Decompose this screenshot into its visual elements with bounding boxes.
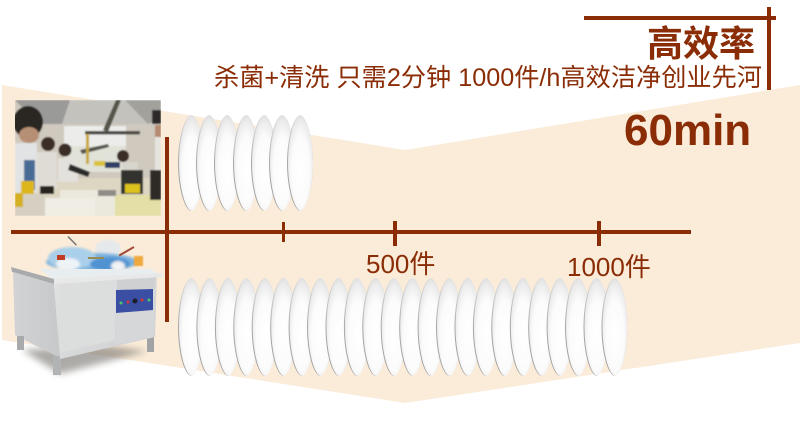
label: 500 pieces: 500件 bbox=[366, 249, 435, 279]
heading: 高效率 bbox=[647, 23, 755, 64]
label: 1000 pieces: 1000件 bbox=[567, 252, 651, 282]
plate stack: machine output bbox=[178, 278, 628, 376]
vertical axis bbox=[165, 137, 169, 322]
top corner frame bbox=[584, 7, 776, 90]
horizontal timeline bbox=[11, 221, 691, 246]
subtitle: 杀菌+清洗 只需2分钟 1000件/h高效洁净创业先河 bbox=[214, 64, 762, 92]
icon: stainless steel dishwasher bbox=[11, 236, 162, 375]
background band bbox=[2, 85, 800, 403]
time label: 60min bbox=[624, 106, 751, 155]
plate stack: 60-minute manual output bbox=[178, 115, 313, 211]
photo: workers washing dishes bbox=[13, 100, 161, 216]
